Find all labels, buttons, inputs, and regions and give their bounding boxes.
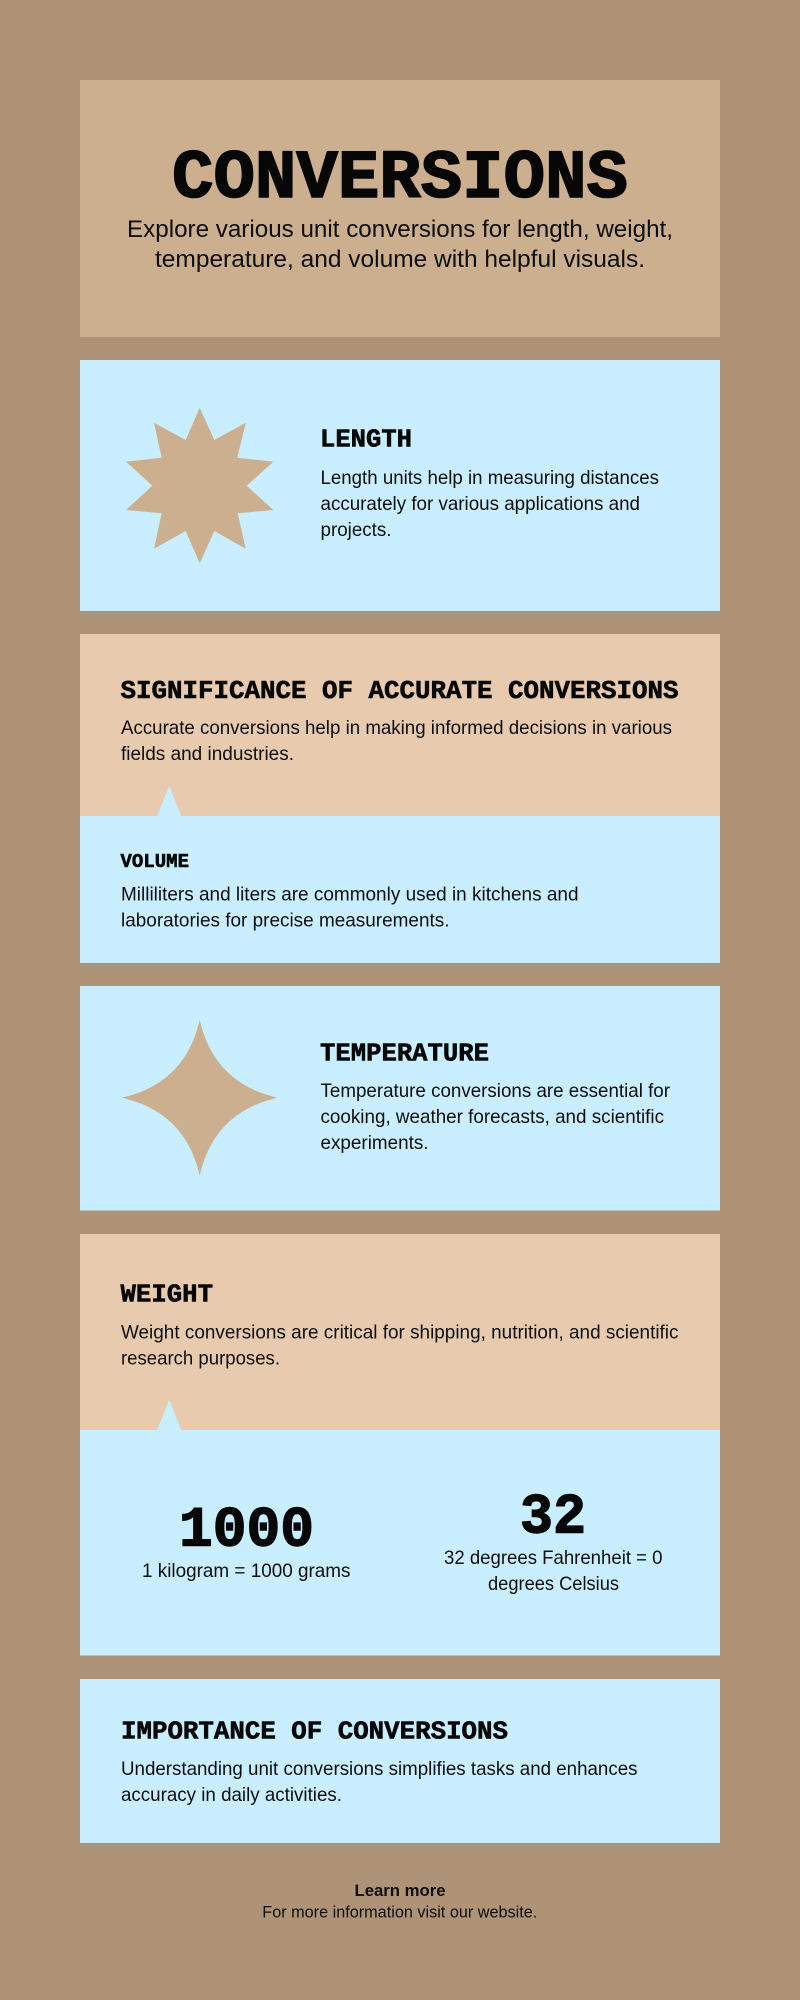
weight heading: WEIGHT — [120, 1281, 213, 1310]
importance background — [80, 1679, 720, 1843]
footer — [262, 1881, 537, 1921]
weight text: Weight conversions are critical for shipping, nutrition, and scientific — [121, 1321, 679, 1343]
panel: importance of conversions — [80, 1679, 720, 1843]
stat number 32: 32 — [520, 1486, 586, 1550]
panel: title header — [80, 80, 720, 337]
volume text — [121, 884, 578, 932]
stat caption — [444, 1547, 663, 1595]
pointer triangle — [157, 1400, 182, 1430]
length text: projects. — [320, 519, 392, 541]
length background — [80, 360, 720, 611]
stat caption: 32 degrees Fahrenheit = 0 — [444, 1547, 663, 1569]
panel: conversion statistics — [80, 1400, 720, 1656]
weight text: research purposes. — [121, 1347, 280, 1369]
subtitle: Explore various unit conversions for length, weight, — [127, 216, 673, 243]
importance text — [121, 1758, 638, 1806]
stat: 32 degrees — [444, 1486, 663, 1595]
length text — [320, 467, 659, 541]
significance text — [121, 717, 672, 765]
importance text: Understanding unit conversions simplifies tasks and enhances — [121, 1758, 638, 1780]
panel: significance of accurate conversions — [80, 634, 720, 816]
length text: accurately for various applications and — [320, 493, 640, 515]
significance text: fields and industries. — [121, 743, 294, 765]
icon: four-point sparkle — [122, 1020, 277, 1175]
panel: volume — [80, 786, 720, 963]
weight background — [80, 1234, 720, 1430]
title: CONVERSIONS — [172, 140, 628, 218]
significance background — [80, 634, 720, 816]
volume background — [80, 816, 720, 963]
volume heading: VOLUME — [120, 851, 189, 873]
significance heading: SIGNIFICANCE OF ACCURATE CONVERSIONS — [120, 677, 678, 706]
significance text: Accurate conversions help in making informed decisions in various — [121, 717, 672, 739]
icon: ten-point star — [126, 408, 273, 563]
panel: length — [80, 360, 720, 611]
header background — [80, 80, 720, 337]
temperature text: experiments. — [320, 1132, 428, 1154]
length text: Length units help in measuring distances — [320, 467, 659, 489]
temperature text: cooking, weather forecasts, and scientific — [320, 1106, 664, 1128]
weight text — [121, 1321, 679, 1369]
learn more: Learn more — [354, 1881, 446, 1900]
footer note: For more information visit our website. — [262, 1903, 537, 1921]
subtitle: temperature, and volume with helpful visuals. — [155, 246, 645, 273]
panel: weight — [80, 1234, 720, 1430]
statistics background — [80, 1430, 720, 1656]
volume text: laboratories for precise measurements. — [121, 910, 450, 932]
temperature text — [320, 1080, 670, 1154]
temperature heading: TEMPERATURE — [320, 1040, 489, 1069]
volume text: Milliliters and liters are commonly used in kitchens and — [121, 884, 578, 906]
subtitle — [127, 216, 673, 273]
stat: 1000 grams — [142, 1500, 351, 1582]
pointer triangle — [157, 786, 182, 816]
importance text: accuracy in daily activities. — [121, 1784, 342, 1806]
importance heading: IMPORTANCE OF CONVERSIONS — [121, 1718, 508, 1747]
stat caption: 1 kilogram = 1000 grams — [142, 1560, 351, 1582]
stat number 1000: 1000 — [179, 1500, 314, 1564]
length heading: LENGTH — [320, 426, 412, 454]
temperature text: Temperature conversions are essential for — [320, 1080, 670, 1102]
panel: temperature — [80, 986, 720, 1210]
stat caption: degrees Celsius — [488, 1573, 619, 1595]
temperature background — [80, 986, 720, 1210]
